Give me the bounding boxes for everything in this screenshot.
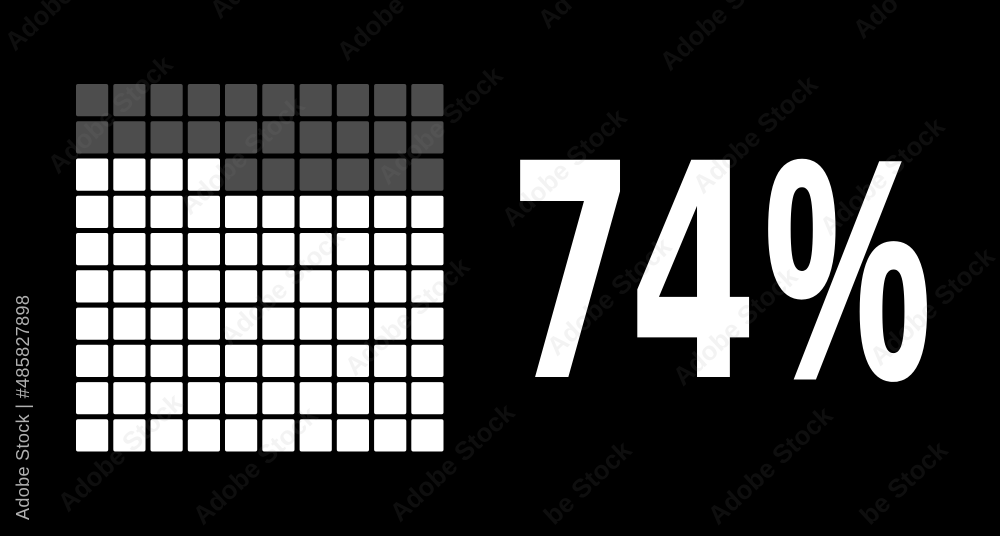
watermark: Adobe Stock: Adobe Stock bbox=[52, 387, 189, 517]
watermark: Adobe Stock: Adobe Stock bbox=[174, 90, 311, 220]
watermark: Adobe Stock: Adobe Stock bbox=[187, 400, 324, 530]
filled squares bbox=[76, 158, 444, 452]
watermark: Adobe Stock: Adobe Stock bbox=[667, 261, 804, 391]
unfilled squares bbox=[76, 84, 444, 191]
watermark: Adobe Stock: Adobe Stock bbox=[384, 397, 521, 527]
percentage value: 74%: 4 bbox=[629, 102, 758, 448]
watermark: Adobe Stock: be Stock bbox=[538, 434, 638, 530]
percentage value: 74%: % bbox=[765, 98, 930, 444]
watermark: Adobe Stock: Adobe Stock bbox=[214, 221, 351, 351]
watermark: Adobe Stock: Adobe Stock bbox=[702, 400, 839, 530]
watermark: Adobe Stock: Adobe Stock bbox=[42, 49, 179, 179]
watermark: Adobe Stock: be Stock bbox=[854, 434, 954, 530]
watermark: Adobe Stock: Adobe Stock bbox=[687, 69, 824, 199]
watermark: Adobe Stock: Adobe Stock bbox=[372, 60, 509, 190]
stock image id label: Adobe Stock | #485827898 bbox=[13, 295, 33, 520]
watermark: Adobe Stock: Adobe Stock bbox=[814, 111, 951, 241]
watermark: Adobe Stock: Adobe Stock bbox=[339, 251, 476, 381]
watermark: Adobe Stock: Adobe Stock bbox=[496, 102, 633, 232]
waffle chart: 74 of 100 squares filled bbox=[76, 84, 444, 452]
percentage value: 74% bbox=[508, 98, 930, 448]
watermark: Adobe Stock: Adobe Stock bbox=[541, 231, 678, 361]
percentage value: 74%: 7 bbox=[508, 102, 634, 448]
watermark: Adobe Stock: Adobe Stock bbox=[864, 241, 1000, 371]
